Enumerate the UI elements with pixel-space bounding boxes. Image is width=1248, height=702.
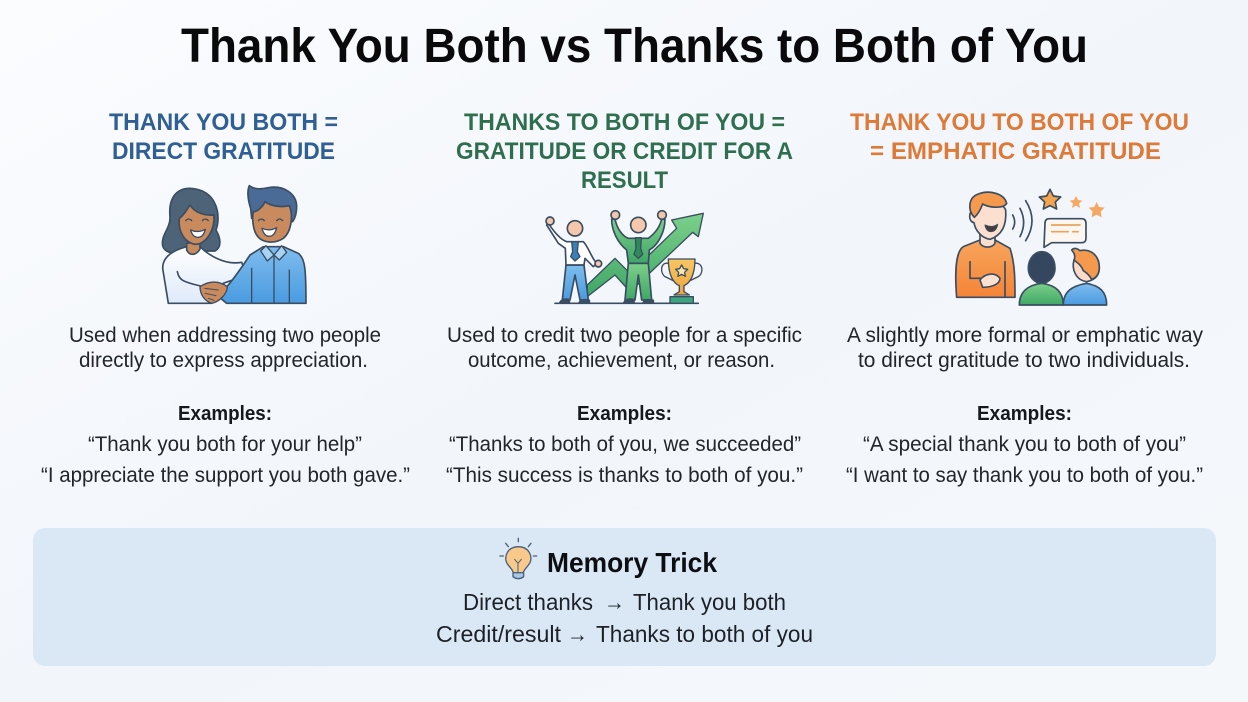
description	[847, 324, 1203, 372]
icon: light bulb	[500, 538, 537, 579]
icon: two people shaking hands	[162, 186, 306, 303]
memory line: direct thanks: Direct thanks	[463, 589, 593, 615]
panel: thank you to both of you	[846, 109, 1203, 487]
heading: gratitude or credit: THANKS TO BOTH OF YOU =	[464, 109, 785, 136]
memory line: direct thanks: Thank you both	[633, 589, 786, 615]
description: Used to credit two people for a specific	[447, 324, 802, 347]
memory line: credit: Credit/result	[436, 621, 562, 647]
heading: direct gratitude: THANK YOU BOTH =	[109, 109, 338, 136]
heading: emphatic gratitude: THANK YOU TO BOTH OF YOU	[850, 109, 1189, 136]
description: directly to express appreciation.	[79, 349, 368, 372]
heading: emphatic gratitude	[850, 109, 1189, 165]
examples	[41, 403, 410, 487]
memory line: credit: →	[567, 621, 588, 647]
examples: “Thank you both for your help”	[88, 433, 362, 456]
heading: emphatic gratitude: = EMPHATIC GRATITUDE	[870, 138, 1161, 165]
description: to direct gratitude to two individuals.	[858, 349, 1190, 372]
panel: memory trick	[33, 528, 1216, 666]
panel: thank you both	[41, 109, 410, 487]
heading: direct gratitude: DIRECT GRATITUDE	[112, 138, 335, 165]
examples: “I appreciate the support you both gave.”	[41, 464, 410, 487]
examples: “A special thank you to both of you”	[863, 433, 1186, 456]
description: Used when addressing two people	[69, 324, 381, 347]
memory line: credit: Thanks to both of you	[596, 621, 813, 647]
title: Thank You Both vs Thanks to Both of You	[181, 20, 1088, 73]
panel: thanks to both of you	[446, 109, 803, 487]
memory line: direct thanks: →	[604, 589, 625, 615]
heading: direct gratitude	[109, 109, 338, 165]
description: A slightly more formal or emphatic way	[847, 324, 1203, 347]
examples: Examples:	[577, 403, 672, 425]
examples	[446, 403, 803, 487]
heading: gratitude or credit: GRATITUDE OR CREDIT FOR A	[456, 138, 793, 165]
heading: gratitude or credit: RESULT	[581, 167, 668, 194]
heading: gratitude or credit	[456, 109, 793, 194]
examples: “I want to say thank you to both of you.”	[846, 464, 1203, 487]
description	[447, 324, 802, 372]
examples: “Thanks to both of you, we succeeded”	[449, 433, 801, 456]
description: outcome, achievement, or reason.	[468, 349, 775, 372]
examples	[846, 403, 1203, 487]
icon: speaker addressing two listeners	[956, 189, 1107, 305]
description	[69, 324, 381, 372]
examples: Examples:	[178, 403, 272, 425]
heading: memory trick: Memory Trick	[547, 547, 717, 578]
examples: Examples:	[977, 403, 1072, 425]
icon: two winners, rising arrow and trophy	[546, 211, 703, 303]
examples: “This success is thanks to both of you.”	[446, 464, 803, 487]
